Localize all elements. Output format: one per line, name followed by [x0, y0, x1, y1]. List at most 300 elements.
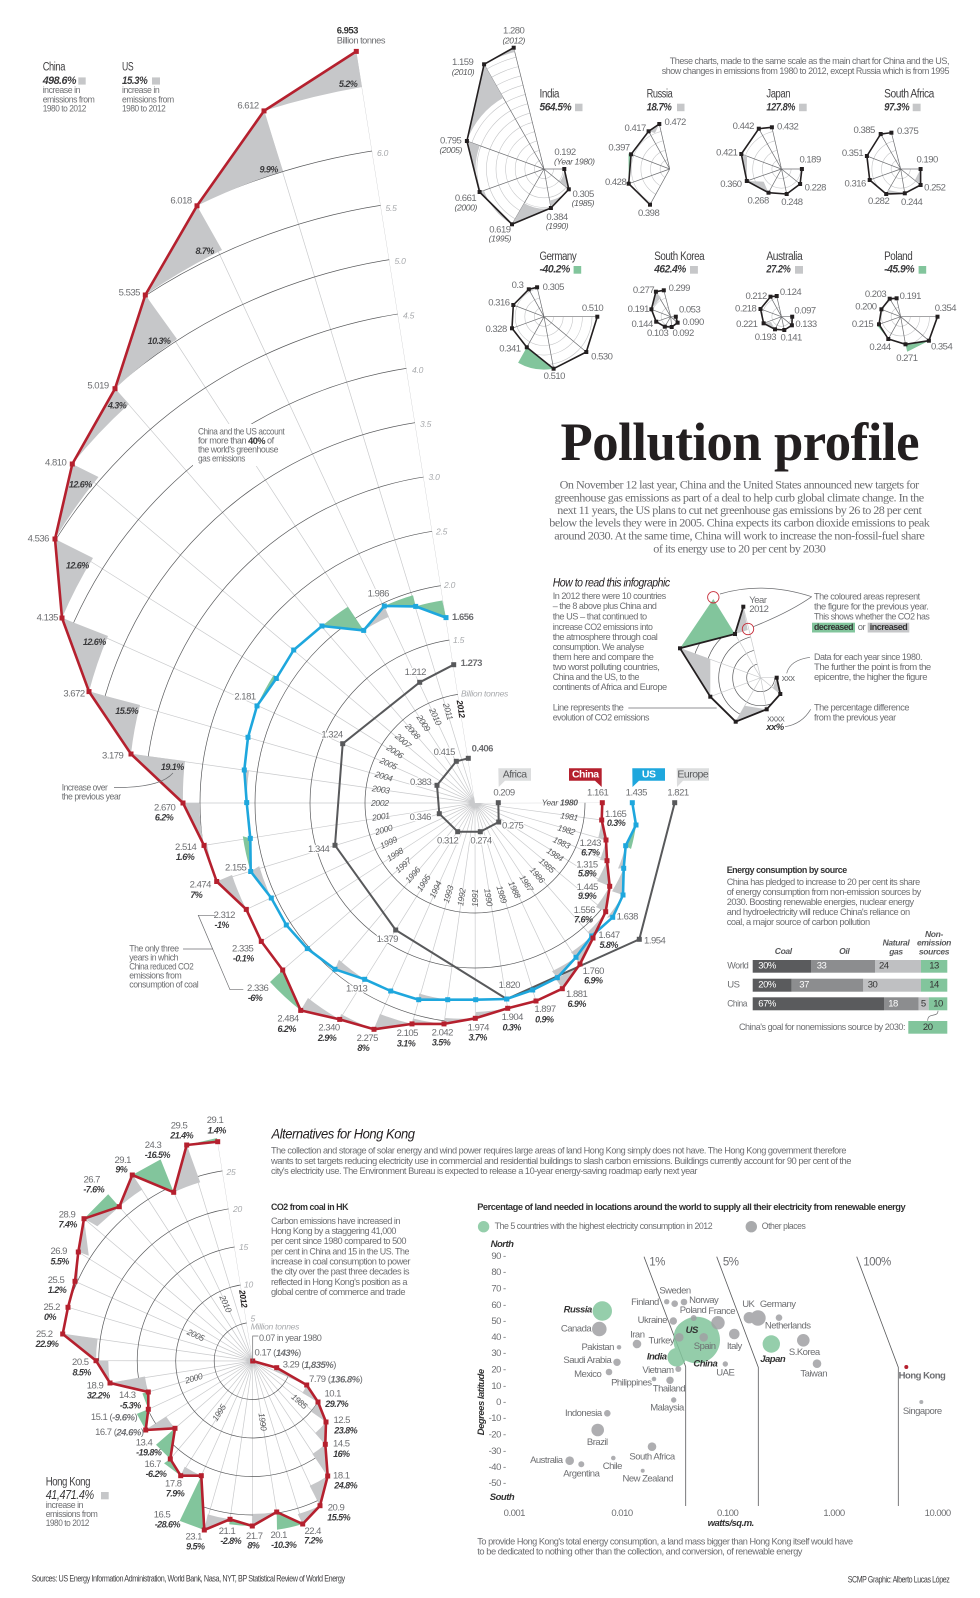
HK value labels: -19.8%	[136, 1447, 162, 1457]
HK value labels: 13.4	[136, 1438, 152, 1448]
region tags: Africa, China, US, Europe: Africa	[503, 768, 527, 780]
year labels around centre: 2000	[373, 822, 394, 837]
stacked bar chart: 33	[817, 960, 826, 972]
year labels around centre: 1987	[517, 873, 536, 894]
heading: energy: Energy consumption by source	[727, 865, 847, 876]
small chart: India: 0.661	[455, 193, 476, 204]
stacked bar chart: China	[727, 998, 748, 1010]
text: explanation: the atmosphere through coal	[553, 632, 658, 643]
text: CO2 from coal in HK: global centre of commerce and trade	[271, 1287, 405, 1298]
China value and percentage labels: 6.7%	[581, 847, 600, 857]
HK value labels: 29.1	[207, 1115, 223, 1126]
US, Europe and Africa value labels: 0.274	[470, 836, 492, 846]
small chart: Japan: 0.442	[733, 121, 754, 132]
China value and percentage labels: 6.953	[337, 26, 358, 36]
China value and percentage labels: 2.105	[397, 1028, 418, 1039]
HK change areas	[63, 1138, 328, 1530]
small chart: South Korea: 0.191	[628, 304, 649, 315]
threshold lines: 1%, 5%, 100%: 1%	[649, 1256, 665, 1268]
small chart: Australia: 0.193	[755, 332, 776, 343]
HK value labels: 18.1	[333, 1470, 350, 1482]
year labels around centre: 1984	[545, 845, 566, 864]
small chart: India: (1995)	[489, 234, 512, 244]
place labels: Indonesia	[565, 1408, 603, 1419]
small chart: Poland: -45.9%	[884, 264, 915, 276]
text: Hong Kong land note: to be dedicated to nothing other than the collection, and conversion, of renewable energy	[477, 1546, 803, 1558]
line: Europe emissions	[335, 665, 675, 999]
year labels around centre: 1989	[495, 884, 509, 905]
small chart: India: 1.159	[452, 57, 474, 68]
small chart: South Korea: 462.4%	[653, 264, 687, 276]
callout: China and US share: the world's greenhouse	[198, 444, 278, 456]
callout: increase over previous year	[62, 773, 173, 802]
year labels around centre: 2009	[414, 712, 433, 734]
region tags: Africa, China, US, Europe: China	[572, 768, 599, 780]
year labels around centre: 1992	[455, 887, 468, 907]
place labels: Australia	[530, 1455, 564, 1466]
year labels around centre: 2012	[455, 698, 467, 719]
axes: 20 -	[491, 1364, 506, 1376]
text: CO2 from coal in HK: increase in coal consumption to power	[271, 1256, 410, 1268]
legend: China and US totals: 498.6%	[42, 75, 77, 87]
small chart: South Africa: 0.375	[897, 126, 918, 137]
legend: China and US totals	[42, 62, 174, 114]
example radar diagram: 2012	[749, 604, 769, 615]
example radar diagram: xx%	[765, 722, 785, 733]
HK value labels: 0%	[44, 1312, 56, 1322]
small chart: South Africa: 0.385	[854, 125, 875, 136]
intro text block: greenhouse gas emissions as part of a deal to help curb global climate change. In the	[555, 492, 924, 504]
panel: how to read this infographic	[552, 578, 931, 730]
place labels: Netherlands	[765, 1320, 811, 1332]
ring scale labels: 5.5	[386, 203, 397, 213]
small chart: India: 0.795	[440, 136, 462, 146]
China value and percentage labels: 5.8%	[578, 869, 597, 879]
China value and percentage labels: 6.9%	[584, 976, 603, 986]
China value and percentage labels: 5.535	[119, 288, 140, 298]
axes: 40 -	[491, 1332, 506, 1343]
HK value labels: -7.6%	[83, 1184, 105, 1194]
place labels: Hong Kong	[899, 1370, 946, 1382]
small chart: Germany: 0.530	[591, 352, 613, 362]
small chart: Australia: 0.133	[795, 319, 817, 330]
HK value labels: -5.3%	[120, 1400, 141, 1410]
stacked bar chart	[727, 929, 951, 1034]
US, Europe and Africa value labels: 1.820	[499, 980, 520, 991]
stacked bar chart: 30%	[758, 960, 777, 972]
China value and percentage labels: 2.484	[277, 1014, 299, 1024]
small chart: Poland: 0.200	[855, 302, 877, 312]
small chart: India: 0.619	[489, 224, 511, 236]
HK legend: Hong Kong	[46, 1477, 90, 1489]
threshold lines: 1%, 5%, 100%: 100%	[863, 1256, 891, 1268]
axes: South	[490, 1492, 515, 1503]
HK value labels: 7.9%	[166, 1488, 185, 1498]
HK value labels	[35, 1115, 363, 1552]
US, Europe and Africa value labels: 1.161	[587, 788, 609, 798]
HK value labels: -2.8%	[220, 1536, 242, 1546]
HK value labels: 28.9	[59, 1210, 75, 1220]
HK value labels: 23.1	[185, 1532, 202, 1542]
stacked bar chart: US	[727, 980, 740, 990]
China value and percentage labels: 6.9%	[568, 999, 586, 1009]
stacked bar chart: Oil	[839, 946, 850, 956]
HK scale and year labels: 25	[226, 1167, 236, 1177]
small chart: Australia: 27.2%	[766, 264, 791, 276]
China value and percentage labels: 1.445	[577, 882, 598, 893]
HK legend: increase in	[46, 1500, 83, 1511]
China value and percentage labels: 2.335	[232, 944, 254, 954]
text: explanation: consumption. We analyse	[553, 642, 644, 653]
HK scale and year labels: 2010	[217, 1293, 234, 1314]
China value and percentage labels: 6.2%	[278, 1024, 296, 1034]
China value and percentage labels: 1.904	[502, 1012, 523, 1023]
China value and percentage labels: 0.3%	[607, 818, 626, 828]
small chart: South Africa: 0.316	[845, 178, 866, 190]
small chart: India: 0.305	[573, 189, 594, 200]
callout: three years of reduced coal: years in which	[129, 952, 178, 964]
HK value labels: 18.9	[87, 1380, 103, 1392]
annotation: data points: epicentre, the higher the figure	[814, 672, 927, 683]
small chart: Poland: 0.354	[931, 342, 952, 352]
axes: -50 -	[489, 1478, 506, 1489]
China value and percentage labels: 2.336	[247, 983, 269, 994]
callout: increase over previous year: Increase over	[62, 782, 108, 794]
ring scale labels: 3.5	[420, 419, 432, 429]
stacked bar chart: 67%	[758, 998, 777, 1010]
small chart: Poland: 0.203	[865, 289, 886, 300]
intro text block: On November 12 last year, China and the United States announced new targets for	[560, 480, 919, 492]
region tags: Africa, China, US, Europe: US	[642, 768, 656, 780]
year labels around centre: Year 1980	[542, 798, 578, 808]
axes: -40 -	[489, 1462, 506, 1473]
small chart: Poland: 0.191	[900, 291, 921, 302]
legend: China and US totals: China	[43, 62, 66, 74]
HK value labels: 8%	[247, 1541, 260, 1551]
annotation: data points	[814, 652, 931, 683]
legend: China and US totals: emissions from	[43, 94, 95, 105]
example radar diagram: xxx	[782, 673, 795, 684]
legend: China and US totals: 1980 to 2012	[122, 103, 165, 114]
HK value labels: 23.8%	[333, 1426, 358, 1436]
HK value labels: -16.5%	[145, 1150, 170, 1160]
China value and percentage labels: -6%	[248, 993, 263, 1003]
place labels: Spain	[694, 1341, 716, 1352]
China value and percentage labels: 0.3%	[503, 1022, 521, 1032]
China value and percentage labels: 1.647	[598, 930, 620, 941]
China value and percentage labels: 12.6%	[83, 637, 106, 647]
HK value labels: 20.9	[328, 1502, 344, 1514]
small chart: South Korea: 0.277	[633, 285, 654, 296]
HK grid	[65, 1144, 326, 1524]
China value and percentage labels: 9.9%	[260, 164, 278, 174]
legend: China and US totals: emissions from	[122, 94, 174, 105]
text: explanation: In 2012 there were 10 countries	[553, 591, 666, 602]
HK value labels: 20.5	[72, 1357, 89, 1368]
HK legend: 1980 to 2012	[46, 1518, 89, 1529]
small chart: Japan: 0.189	[799, 154, 821, 166]
sources: Sources: US Energy Information Administration, World Bank, Nasa, NYT, BP Statistical Review of World Energy	[32, 1574, 345, 1584]
China value and percentage labels: 3.5%	[432, 1037, 451, 1047]
place labels: Ukraine	[638, 1315, 667, 1326]
place labels: India	[647, 1352, 667, 1362]
China value and percentage labels: 3.7%	[469, 1032, 487, 1042]
text: energy description: China has pledged to increase to 20 per cent its share	[727, 877, 920, 888]
place labels	[530, 1286, 946, 1484]
HK value labels: 29.1	[114, 1155, 131, 1166]
small chart: Russia: 0.472	[665, 117, 686, 128]
place labels: Saudi Arabia	[563, 1355, 612, 1366]
small chart: India: (2012)	[502, 36, 525, 46]
small chart: Australia: 0.221	[736, 319, 758, 330]
HK value labels: 7.79 (136.8%)	[309, 1374, 363, 1385]
intro text block	[549, 480, 930, 555]
heading: how to read: How to read this infographic	[553, 577, 670, 589]
annotation: coloured areas: increased	[870, 622, 908, 633]
HK scale and year labels: 2000	[183, 1371, 204, 1386]
HK scale and year labels: 10	[244, 1280, 253, 1290]
title: Pollution profile	[560, 412, 919, 472]
HK value labels: 29.7%	[324, 1399, 349, 1409]
place labels: New Zealand	[622, 1474, 673, 1484]
year labels around centre: 2011	[441, 701, 455, 722]
HK value labels: 25.2	[36, 1329, 53, 1340]
year labels around centre: 1993	[441, 884, 456, 904]
year labels around centre: 1991	[470, 889, 480, 907]
China value and percentage labels: 1.243	[580, 838, 601, 849]
stacked bar chart: China's goal for nonemissions source by 2030:	[739, 1022, 905, 1033]
HK value labels: 9%	[115, 1165, 128, 1175]
small chart: South Africa: 97.3%	[884, 101, 910, 113]
text: explanation: increase CO2 emissions into	[553, 622, 653, 633]
HK value labels: 15.5%	[327, 1513, 351, 1523]
small chart: Germany: 0.3	[512, 280, 524, 291]
US, Europe and Africa value labels: 1.954	[644, 936, 666, 946]
axes: -30 -	[489, 1446, 506, 1457]
place labels: Poland	[680, 1305, 707, 1316]
ring scale labels	[377, 148, 509, 699]
scatter legend: Other places	[762, 1221, 806, 1232]
stacked bar chart: 20	[923, 1022, 933, 1033]
China value and percentage labels: 19.1%	[161, 762, 184, 772]
callout: three years of reduced coal: emissions from	[129, 970, 182, 982]
small chart: Germany: -40.2%	[540, 264, 570, 276]
place labels: Brazil	[587, 1437, 608, 1448]
HK value labels: 14.5	[333, 1438, 350, 1450]
HK value labels: 24.8%	[333, 1481, 358, 1491]
year labels around centre: 2006	[384, 742, 406, 761]
stacked bar chart: Coal	[775, 946, 793, 956]
text: explanation	[553, 591, 667, 724]
China value and percentage labels: 3.672	[63, 688, 85, 700]
small chart: Russia	[605, 88, 686, 216]
small chart: India: 0.384	[546, 212, 568, 223]
China value and percentage labels: 1.760	[583, 966, 604, 977]
small chart: South Korea: South Korea	[654, 251, 705, 263]
place labels: Sweden	[659, 1286, 691, 1296]
HK value labels: 10.1	[324, 1388, 341, 1400]
China value and percentage labels: 12.6%	[66, 560, 89, 570]
ring scale labels: 5.0	[394, 256, 406, 266]
callout: China and US share	[193, 424, 288, 466]
China value and percentage labels: 9.9%	[578, 891, 597, 901]
text: energy description: coal, a major source of carbon pollution	[727, 917, 870, 928]
US, Europe and Africa value labels: 0.275	[502, 820, 524, 832]
legend: China and US totals: US	[122, 62, 134, 74]
bubbles	[565, 1299, 923, 1473]
HK value labels: 22.9%	[35, 1339, 59, 1349]
text: CO2 from coal in HK: Carbon emissions have increased in	[271, 1216, 400, 1227]
axes: 50 -	[491, 1316, 506, 1327]
HK value labels: 0.17 (143%)	[255, 1348, 301, 1358]
line: US emissions	[244, 606, 636, 1000]
small chart: Russia: 0.417	[625, 123, 646, 134]
axes: North	[491, 1239, 514, 1250]
legend: China and US totals: increase in	[43, 85, 80, 96]
China value and percentage labels: 1.6%	[176, 852, 195, 862]
text: energy description: 2030. Boosting renewable energies, nuclear energy	[727, 897, 914, 908]
China value and percentage labels: 2.474	[190, 880, 211, 891]
stacked bar chart: 37	[799, 980, 809, 990]
legend: China and US totals: 15.3%	[122, 75, 148, 87]
line: Africa emissions	[437, 758, 499, 832]
China value and percentage labels: 4.3%	[107, 401, 127, 411]
callout: China and US share: for more than 40% of	[198, 436, 275, 446]
US, Europe and Africa value labels: 0.346	[410, 812, 431, 823]
stacked bar chart: 10	[933, 998, 943, 1010]
text: explanation: continents of Africa and Europe	[553, 682, 667, 693]
China value and percentage labels: 2.275	[357, 1033, 378, 1044]
China value and percentage labels: 4.536	[28, 534, 49, 544]
year labels around centre: 1983	[551, 834, 572, 851]
place labels: Finland	[631, 1297, 659, 1308]
year labels around centre: 1981	[560, 810, 579, 823]
axes: 80 -	[491, 1267, 506, 1278]
China value and percentage labels: 1.165	[605, 809, 627, 820]
US, Europe and Africa value labels: 2.181	[234, 692, 256, 702]
China value and percentage labels: -0.1%	[233, 954, 254, 964]
small chart: Russia: Russia	[647, 88, 673, 100]
HK value labels: 22.4	[304, 1526, 321, 1537]
HK value labels: 16.7	[144, 1459, 161, 1470]
HK value labels: 29.5	[171, 1120, 187, 1132]
HK value labels: 1.2%	[48, 1285, 67, 1295]
small chart: South Korea: 0.144	[631, 319, 653, 330]
text: CO2 from coal in HK: per cent in China and 15 in the US. The	[271, 1246, 409, 1258]
year labels around centre: 1982	[556, 823, 577, 837]
China value and percentage labels: 6.018	[170, 196, 192, 206]
ring scale labels: 4.5	[403, 310, 415, 320]
year labels around centre: 1996	[403, 865, 423, 885]
note: about the small charts	[662, 56, 949, 77]
axes: 90 -	[491, 1251, 506, 1262]
small chart: Germany: 0.510	[544, 371, 565, 382]
US, Europe and Africa value labels: 1.344	[308, 844, 330, 855]
HK scale and year labels: 1990	[256, 1412, 269, 1432]
small chart: India: 0.192	[554, 147, 576, 158]
small chart: South Korea	[628, 251, 705, 336]
year labels around centre: 1986	[528, 865, 547, 885]
year labels around centre: 2003	[370, 783, 391, 796]
small chart: India	[440, 27, 594, 243]
annotation: coloured areas: This shows whether the CO2 has	[814, 612, 930, 622]
place labels: Canada	[561, 1324, 592, 1334]
China value and percentage labels: 5.019	[87, 380, 109, 392]
HK value labels: 26.7	[83, 1174, 100, 1186]
example radar diagram: xxxx	[767, 714, 785, 724]
HK value labels: 8.5%	[73, 1367, 91, 1377]
small chart: South Africa: 0.282	[868, 196, 889, 207]
HK value labels: 20.1	[270, 1530, 287, 1541]
HK scale and year labels: 1985	[289, 1392, 310, 1411]
small chart: Poland	[852, 251, 956, 361]
HK value labels: 16.7 (24.6%)	[95, 1427, 144, 1438]
text: explanation: Line represents the	[553, 702, 624, 714]
place labels: Vietnam	[642, 1365, 674, 1376]
intro text block: next 11 years, the US plans to cut net greenhouse gas emissions by 26 to 28 per cent	[557, 505, 923, 517]
HK value labels: 17.8	[165, 1478, 182, 1490]
small chart: Poland: 0.271	[896, 353, 918, 364]
scatter legend: The 5 countries with the highest electricity consumption in 2012	[495, 1221, 712, 1232]
text: explanation: two worst polluting countries,	[553, 662, 659, 673]
small chart: South Korea: 0.299	[669, 283, 690, 294]
small chart: Australia: 0.212	[745, 291, 767, 302]
small chart: Russia: 0.397	[608, 142, 630, 154]
ring scale labels: 6.0	[377, 148, 389, 158]
small chart: Japan: 0.248	[781, 197, 803, 208]
small chart: India: 1.280	[503, 26, 525, 36]
ring scale labels: 3.0	[428, 472, 440, 482]
text: CO2 from coal in HK: reflected in Hong Kong's position as a	[271, 1277, 408, 1288]
annotation: coloured areas: the figure for the previous year.	[814, 602, 928, 612]
small chart: South Africa: 0.351	[842, 148, 863, 159]
China value and percentage labels: 3.1%	[397, 1038, 416, 1048]
US, Europe and Africa value labels: 2.155	[225, 862, 247, 874]
small chart: Germany: 0.328	[485, 324, 507, 335]
text: energy description	[727, 877, 921, 928]
China value and percentage labels: 5.2%	[339, 79, 358, 89]
small chart: South Korea: 0.053	[679, 304, 700, 316]
small chart: Germany: 0.341	[499, 344, 521, 354]
axes: 0 -	[496, 1397, 506, 1408]
place labels: China	[693, 1358, 717, 1370]
China value and percentage labels: 1.556	[574, 905, 595, 916]
small chart: Poland: 0.244	[869, 342, 891, 353]
threshold lines: 1%, 5%, 100%	[644, 1256, 898, 1506]
small chart: India: (2010)	[452, 67, 475, 77]
China value and percentage labels: 7%	[190, 890, 203, 900]
HK legend: 41,471.4%	[46, 1488, 94, 1502]
stacked bar chart: 18	[888, 998, 898, 1010]
text: explanation: them here and compare the	[553, 652, 654, 663]
small chart: Australia: 0.097	[794, 306, 816, 316]
place labels: Malaysia	[650, 1402, 685, 1414]
ring scale labels: 1.5	[453, 635, 465, 645]
China value and percentage labels	[28, 26, 627, 1053]
axes: 10 -	[491, 1381, 506, 1392]
annotation: coloured areas: or	[858, 622, 865, 633]
text: Hong Kong land note	[477, 1536, 853, 1558]
China value and percentage labels: 2.312	[214, 910, 235, 921]
HK value labels: 12.5	[333, 1415, 350, 1426]
stacked bar chart: 24	[879, 960, 889, 972]
note: about the small charts: These charts, made to the same scale as the main chart for China and the US,	[670, 56, 949, 67]
US, Europe and Africa value labels: 0.312	[437, 836, 459, 846]
axes: 0.001	[504, 1508, 525, 1519]
place labels: Iran	[630, 1330, 645, 1340]
small chart: India: (1990)	[546, 221, 569, 231]
China value and percentage labels: 7.6%	[574, 914, 593, 924]
